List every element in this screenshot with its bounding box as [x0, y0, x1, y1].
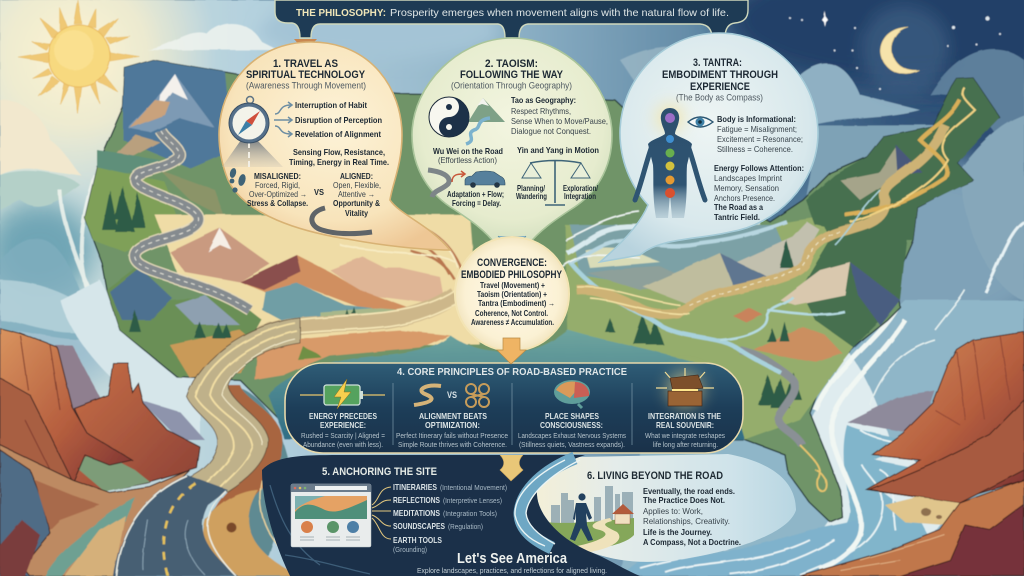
convergence text: Tantra (Embodiment) →	[478, 298, 555, 308]
anchoring list: REFLECTIONS	[393, 495, 440, 505]
anchoring list	[393, 482, 507, 554]
sun	[18, 0, 140, 114]
integration is the real souvenir: life long after returning.	[653, 442, 718, 449]
convergence text: Taoism (Orientation) +	[477, 289, 547, 299]
panel 2 heading: (Orientation Through Geography)	[451, 80, 572, 90]
energy precedes experience: Rushed = Scarcity | Aligned =	[301, 433, 385, 440]
arrow into panel 4	[497, 338, 526, 364]
panel 6 text: A Compass, Not a Doctrine.	[643, 537, 741, 547]
icon: battery	[300, 379, 385, 409]
anchoring list: (Grounding)	[393, 547, 427, 554]
icon: house	[612, 504, 634, 524]
river ribbon	[520, 458, 575, 548]
aligned column: ALIGNED:	[340, 171, 373, 181]
moon and stars	[789, 5, 1001, 95]
energy follows attention text: Energy Follows Attention:	[714, 163, 804, 173]
aligned column	[333, 171, 381, 218]
three stages list: Disruption of Perception	[295, 115, 382, 125]
panel 2 heading	[451, 58, 572, 90]
panel 1 heading: SPIRITUAL TECHNOLOGY	[246, 69, 366, 81]
arrow from panel 2 to convergence	[498, 236, 526, 260]
misaligned column	[247, 171, 308, 208]
anchoring list: EARTH TOOLS	[393, 535, 442, 545]
body is informational text: Excitement = Resonance;	[717, 134, 803, 144]
panel: convergence	[455, 237, 569, 351]
tao as geography text: Respect Rhythms,	[511, 106, 571, 116]
panel 6: living beyond the road	[537, 454, 796, 562]
wu wei text	[433, 146, 503, 165]
column dividers	[393, 383, 632, 445]
arrows to three stages	[274, 102, 292, 137]
panel 3 heading: EMBODIMENT THROUGH	[662, 69, 778, 81]
teal central band	[268, 330, 745, 440]
philosophy statement: THE PHILOSOPHY:	[296, 7, 386, 19]
panel 6 text	[643, 486, 741, 547]
icon: brain	[554, 380, 590, 408]
place shapes consciousness: CONSCIOUSNESS:	[540, 420, 603, 430]
eastern plains	[565, 78, 1000, 440]
integration is the real souvenir	[645, 411, 725, 449]
yin and yang in motion: Integration	[564, 191, 596, 201]
tao as geography text	[511, 95, 608, 136]
place shapes consciousness: Landscapes Exhaust Nervous Systems	[518, 433, 626, 440]
panel 2 heading: 2. TAOISM:	[485, 58, 538, 70]
anchoring list: ITINERARIES	[393, 482, 437, 492]
convergence heading: EMBODIED PHILOSOPHY	[461, 269, 562, 281]
panel 6 text: The Practice Does Not.	[643, 495, 725, 505]
tao as geography text: Tao as Geography:	[511, 95, 576, 105]
anchoring list: (Interpretive Lenses)	[443, 498, 502, 505]
arrow to panel 1	[294, 39, 317, 52]
anchoring list: SOUNDSCAPES	[393, 521, 445, 531]
convergence heading	[461, 257, 562, 281]
panel 3: tantra	[600, 33, 818, 262]
panel 6 text: Applies to: Work,	[643, 506, 703, 516]
panel 3 heading: (The Body as Compass)	[676, 92, 763, 102]
energy follows attention text: Tantric Field.	[714, 212, 760, 222]
integration is the real souvenir: REAL SOUVENIR:	[656, 420, 714, 430]
west winding road	[135, 130, 250, 310]
panel 2: taoism	[412, 38, 612, 250]
alignment beats optimization	[396, 411, 508, 449]
panel 3 heading: 3. TANTRA:	[693, 57, 742, 69]
tao as geography text: Sense When to Move/Pause,	[511, 116, 608, 126]
central flows	[262, 212, 787, 340]
energy precedes experience	[301, 411, 385, 449]
place shapes consciousness: (Stillness quiets, Vastness expands).	[519, 442, 625, 449]
panel 5 heading: 5. ANCHORING THE SITE	[322, 466, 437, 478]
convergence heading: CONVERGENCE:	[477, 257, 547, 269]
convergence text: Travel (Movement) +	[480, 280, 545, 290]
yin and yang in motion: Wandering	[516, 191, 547, 201]
body is informational text: Body is Informational:	[717, 114, 796, 124]
adaptation text: Adaptation + Flow;	[447, 189, 504, 199]
yin and yang in motion	[516, 145, 599, 205]
eastern canyon	[800, 332, 1024, 576]
integration is the real souvenir: INTEGRATION IS THE	[648, 411, 721, 421]
icon: smooth road versus knot	[414, 384, 489, 407]
misaligned column: Stress & Collapse.	[247, 198, 308, 208]
wu wei text: Wu Wei on the Road	[433, 146, 503, 156]
panel 2 heading: FOLLOWING THE WAY	[460, 69, 564, 81]
anchoring list: MEDITATIONS	[393, 508, 440, 518]
aligned column: Open, Flexible,	[333, 180, 381, 190]
river highlight	[515, 460, 580, 546]
panel 1 heading: 1. TRAVEL AS	[273, 58, 338, 70]
integration is the real souvenir: What we integrate reshapes	[645, 433, 725, 440]
western canyon	[0, 328, 205, 576]
place shapes consciousness	[518, 411, 626, 449]
energy precedes experience: EXPERIENCE:	[320, 420, 366, 430]
icon: mountain and river	[466, 98, 505, 144]
convergence text	[471, 280, 555, 327]
icon: walking person	[570, 493, 593, 541]
body is informational text	[717, 114, 803, 154]
panel 1: travel as spiritual technology	[219, 42, 450, 250]
panel 6 illustration	[545, 486, 634, 552]
three stages list: Revelation of Alignment	[295, 129, 381, 139]
road under compass	[222, 140, 283, 167]
sensing flow text: Sensing Flow, Resistance,	[293, 147, 385, 157]
river and eastern roads	[570, 88, 975, 491]
anchoring list: (Integration Tools)	[443, 511, 497, 518]
philosophy statement: Prosperity emerges when movement aligns with the natural flow of life.	[390, 7, 729, 19]
main road	[113, 318, 310, 576]
alignment beats optimization: Simple Route thrives with Coherence.	[398, 442, 507, 449]
eastern ocean and river	[620, 222, 1024, 576]
panel 6 heading: 6. LIVING BEYOND THE ROAD	[587, 470, 723, 482]
vs label: VS	[314, 187, 324, 197]
panel 1 heading	[246, 58, 366, 90]
body is informational text: Fatigue = Misalignment;	[717, 124, 797, 134]
wu wei text: (Effortless Action)	[438, 155, 497, 165]
arrow to panel 3	[707, 39, 730, 52]
convergence text: Awareness ≠ Accumulation.	[471, 317, 554, 327]
body is informational text: Stillness = Coherence.	[717, 144, 793, 154]
energy follows attention text: Anchors Presence.	[714, 193, 775, 203]
icon: footprints	[229, 167, 247, 193]
energy precedes experience: Abundance (even with less).	[303, 442, 383, 449]
yin and yang in motion: Yin and Yang in Motion	[517, 145, 599, 155]
website window illustration	[291, 484, 371, 547]
aligned column: Opportunity &	[333, 198, 380, 208]
panel 6 text: Eventually, the road ends.	[643, 486, 735, 496]
icon: balance scale	[522, 160, 590, 205]
energy follows attention text	[714, 163, 804, 222]
panel 6 text: Relationships, Creativity.	[643, 516, 730, 526]
panel 4 heading: 4. CORE PRINCIPLES OF ROAD-BASED PRACTICE	[397, 366, 627, 378]
three stages list	[295, 100, 382, 139]
place shapes consciousness: PLACE SHAPES	[545, 411, 599, 421]
swirl lines	[270, 485, 370, 574]
icon: smooth road versus knot: VS	[447, 390, 457, 400]
misaligned column: Forced, Rigid,	[255, 180, 300, 190]
aligned column: Attentive →	[338, 189, 375, 199]
misaligned column: MISALIGNED:	[254, 171, 301, 181]
energy follows attention text: Landscapes Imprint	[714, 173, 783, 183]
panel 5: anchoring the site	[262, 455, 640, 576]
connector lines	[372, 487, 391, 539]
sensing flow text: Timing, Energy in Real Time.	[289, 157, 389, 167]
panel 6 text: Life is the Journey.	[643, 527, 712, 537]
panel 1 heading: (Awareness Through Movement)	[246, 80, 366, 90]
energy follows attention text: Memory, Sensation	[714, 183, 779, 193]
icon: road and car	[428, 170, 505, 197]
adaptation text: Forcing = Delay.	[452, 198, 501, 208]
alignment beats optimization: Perfect Itinerary fails without Presence	[396, 433, 508, 440]
anchoring list: (Intentional Movement)	[440, 485, 507, 492]
yin and yang in motion: Planning/	[517, 183, 545, 193]
icon: treasure chest	[656, 368, 714, 408]
arrow to panel 2	[500, 39, 524, 52]
anchoring list: (Regulation)	[448, 524, 483, 531]
tao as geography text: Dialogue not Conquest.	[511, 126, 591, 136]
icon: eye	[688, 117, 713, 127]
icon: compass	[229, 96, 269, 143]
philosophy banner	[275, 0, 748, 52]
energy precedes experience: ENERGY PRECEDES	[309, 411, 377, 421]
three stages list: Interruption of Habit	[295, 100, 367, 110]
arrow into panel 5	[500, 455, 523, 481]
icon: body with chakras	[635, 104, 705, 218]
convergence text: Coherence, Not Control.	[475, 308, 548, 318]
icon: yin yang	[429, 97, 469, 137]
site title: Let's See America	[457, 551, 568, 567]
small road in panel 1	[312, 208, 372, 234]
alignment beats optimization: OPTIMIZATION:	[425, 420, 480, 430]
panel 4: core principles	[285, 338, 743, 453]
central plains: sky band and mountains	[107, 215, 480, 380]
misaligned column: Over-Optimized →	[249, 189, 307, 199]
panel 3 heading: EXPERIENCE	[690, 81, 750, 93]
alignment beats optimization: ALIGNMENT BEATS	[419, 411, 487, 421]
yin and yang in motion: Exploration/	[563, 183, 598, 193]
northwest mountains	[85, 60, 232, 252]
energy follows attention text: The Road as a	[714, 202, 763, 212]
panel 3 heading	[662, 57, 778, 102]
sensing flow text	[289, 147, 389, 167]
aligned column: Vitality	[345, 208, 368, 218]
adaptation text	[447, 189, 504, 208]
site tagline: Explore landscapes, practices, and reflections for aligned living.	[417, 566, 607, 575]
